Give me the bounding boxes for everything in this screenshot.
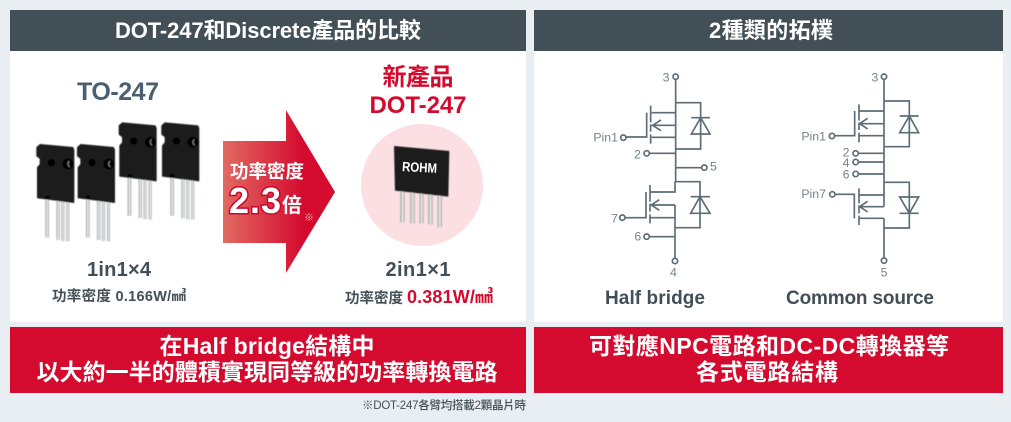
- heading: product comparison: [10, 10, 526, 51]
- label: TO-247: TO-247: [77, 78, 159, 106]
- circuit: common source: Pin1: [801, 129, 826, 143]
- label: new product DOT-247: [370, 63, 466, 119]
- text: TO-247 power density: 功率密度 0.166W/㎣: [52, 287, 186, 305]
- image: four TO-247 packages: [37, 123, 199, 241]
- circuit: half bridge: 3: [663, 70, 670, 84]
- label: half bridge: Half bridge: [605, 288, 705, 309]
- circuit: common source: 2: [843, 146, 850, 160]
- circuit: common source: 4: [843, 156, 850, 170]
- image: DOT-247 package in pink circle: [361, 124, 483, 246]
- heading: two topologies: 2種類的拓樸: [709, 18, 833, 43]
- text: DOT-247 power density: [345, 286, 493, 307]
- panel: product comparison: [10, 10, 526, 322]
- circuit: common source: 3: [871, 70, 878, 84]
- callout: topology benefit: 可對應NPC電路和DC-DC轉換器等: [589, 333, 949, 359]
- callout: half bridge benefit: [10, 327, 526, 393]
- circuit: common source: Pin7: [801, 187, 826, 201]
- arrow: power density 2.3x: 2.3: [229, 180, 281, 221]
- circuit: half bridge: 2: [634, 147, 641, 161]
- callout: half bridge benefit: 在Half bridge結構中: [160, 333, 374, 359]
- circuit: half bridge: 6: [634, 230, 641, 244]
- circuit: half bridge: 5: [710, 159, 717, 173]
- callout: topology benefit: 各式電路結構: [696, 359, 838, 385]
- label: 2in1x1: 2in1×1: [386, 259, 450, 281]
- arrow: power density 2.3x: 功率密度: [230, 161, 304, 182]
- footnote: ※DOT-247各臂均搭載2顆晶片時: [362, 398, 526, 412]
- arrow: power density 2.3x: 倍: [282, 193, 302, 217]
- circuit: half bridge: Pin1: [593, 130, 618, 144]
- label: new product DOT-247: 新產品: [382, 63, 454, 91]
- circuit: half bridge: 4: [670, 265, 677, 279]
- heading: two topologies: [534, 10, 1003, 51]
- label: 1in1x4: 1in1×4: [87, 259, 152, 281]
- circuit: half bridge: 7: [611, 212, 618, 226]
- circuit: half bridge: [593, 70, 717, 279]
- panel: two topologies: [534, 10, 1003, 322]
- text: DOT-247 power density: 0.381W/㎣: [407, 286, 493, 307]
- arrow: power density 2.3x: [223, 110, 335, 273]
- text: DOT-247 power density: 功率密度: [345, 289, 404, 307]
- arrow: power density 2.3x: ※: [304, 213, 314, 224]
- label: new product DOT-247: DOT-247: [370, 92, 466, 119]
- image: DOT-247 package in pink circle: ROHM: [402, 159, 437, 176]
- label: common source: Common source: [786, 288, 934, 309]
- circuit: common source: 6: [843, 167, 850, 181]
- heading: product comparison: DOT-247和Discrete產品的比較: [115, 18, 421, 43]
- circuit: common source: [801, 70, 919, 279]
- callout: half bridge benefit: 以大約一半的體積實現同等級的功率轉換電路: [36, 359, 498, 385]
- callout: topology benefit: [534, 327, 1003, 393]
- circuit: common source: 5: [881, 265, 888, 279]
